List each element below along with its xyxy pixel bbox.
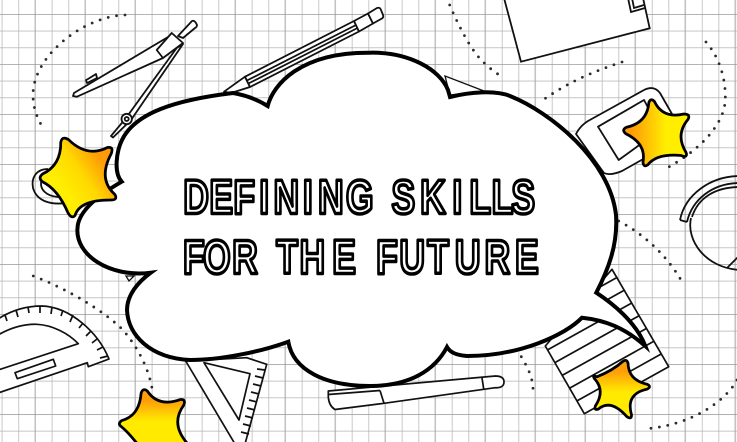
- icon: star upper right: [624, 100, 689, 166]
- title: [183, 170, 539, 284]
- icon: star upper left: [40, 138, 116, 217]
- icon: set square: [186, 358, 267, 442]
- icon: right ring: [680, 176, 737, 270]
- title line 1: DEFINING SKILLS: [183, 170, 535, 224]
- icon: clipboard sheet: [504, 0, 650, 62]
- icon: compass: [73, 21, 197, 138]
- speech bubble: [77, 53, 645, 386]
- icon: left ring: [33, 169, 66, 204]
- icon: star lower right: [594, 360, 650, 418]
- icon: device frame: [576, 88, 672, 174]
- icon: protractor: [0, 306, 109, 393]
- icon: ruled notebook: [533, 269, 669, 414]
- icon: pen: [328, 376, 504, 410]
- small paper corners behind bubble: [126, 76, 484, 281]
- title line 2: FOR THE FUTURE: [183, 230, 539, 284]
- icon: star bottom: [119, 390, 190, 442]
- icon: pencil: [224, 8, 383, 93]
